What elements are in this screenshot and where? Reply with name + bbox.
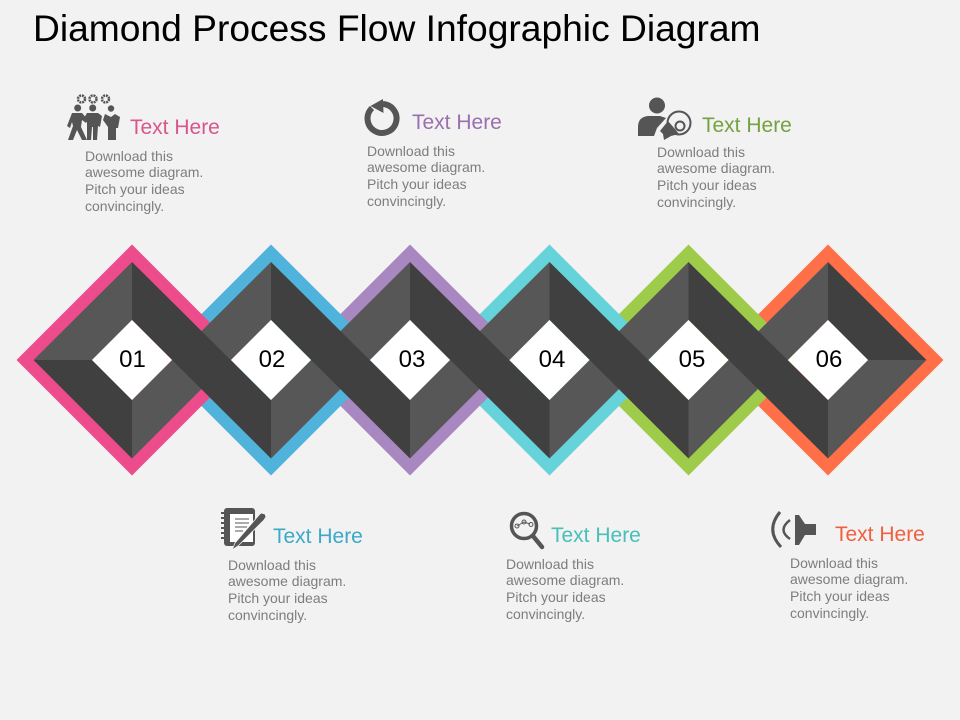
ribbon 05 to 06 (688, 262, 828, 458)
description: awesome diagram. (657, 160, 775, 176)
description: convincingly. (85, 198, 164, 214)
description: Download this (790, 555, 878, 571)
description: Download this (657, 144, 745, 160)
diamond frame 05 (573, 244, 804, 476)
diamond frame 03 (294, 244, 526, 476)
diamond frame 04 (434, 244, 665, 476)
description: Pitch your ideas (228, 590, 328, 606)
diamond 05 facets (590, 262, 787, 458)
number badge 03: 03 (399, 346, 425, 373)
diamond 03 facets (312, 262, 508, 458)
description: awesome diagram. (228, 573, 346, 589)
ribbon 04 to 05 (550, 262, 688, 458)
description: awesome diagram. (506, 572, 624, 588)
description: awesome diagram. (790, 571, 908, 587)
number badge 05: 05 (679, 346, 705, 373)
ribbon 01 to 02 (132, 262, 271, 458)
description: Pitch your ideas (506, 589, 606, 605)
number badge 02 (231, 320, 311, 400)
description: convincingly. (228, 607, 307, 623)
description: convincingly. (367, 193, 446, 209)
diamond frame 02 (156, 244, 386, 476)
description: Pitch your ideas (657, 177, 757, 193)
number badge 04 (510, 320, 590, 400)
ribbon 03 to 04 (410, 262, 550, 458)
description: Download this (228, 557, 316, 573)
icon: person with target bubble (638, 98, 690, 140)
number badge 06 (788, 320, 868, 400)
block 06 (773, 512, 925, 621)
description: Download this (85, 148, 173, 164)
title: Diamond Process Flow Infographic Diagram (33, 7, 761, 49)
number badge 01 (92, 320, 172, 400)
description: convincingly. (657, 194, 736, 210)
block 03 (367, 99, 502, 209)
description: Pitch your ideas (367, 176, 467, 192)
description: convincingly. (790, 605, 869, 621)
description: Pitch your ideas (85, 181, 185, 197)
description: awesome diagram. (367, 159, 485, 175)
heading: Text Here (412, 111, 502, 134)
description: awesome diagram. (85, 164, 203, 180)
icon: team with gears (67, 96, 120, 140)
block 01 (67, 96, 220, 214)
heading: Text Here (273, 525, 363, 548)
number badge 02: 02 (259, 346, 285, 373)
number badge 03 (370, 320, 450, 400)
diamond 02 facets (172, 262, 370, 458)
diamond 06 facets (730, 262, 926, 458)
diamond frame 01 (16, 244, 248, 476)
diamond chain (16, 244, 944, 476)
block 05 (638, 98, 792, 210)
description: Pitch your ideas (790, 588, 890, 604)
block 04 (506, 514, 641, 622)
description: Download this (506, 556, 594, 572)
number badge 06: 06 (816, 346, 842, 373)
diamond 04 facets (451, 262, 648, 458)
heading: Text Here (551, 524, 641, 547)
number badge 01: 01 (119, 346, 146, 373)
number badge 05 (648, 320, 728, 400)
heading: Text Here (130, 116, 220, 139)
number badge 04: 04 (539, 346, 565, 373)
heading: Text Here (702, 114, 792, 137)
icon: circular arrow (368, 99, 397, 133)
block 02 (221, 508, 363, 623)
diamond frame 06 (712, 244, 944, 476)
description: convincingly. (506, 606, 585, 622)
ribbon 02 to 03 (271, 262, 410, 458)
icon: speaker (773, 512, 816, 547)
diamond 01 facets (34, 262, 230, 458)
icon: magnifier with chart (512, 514, 542, 547)
description: Download this (367, 143, 455, 159)
icon: notebook and pen (221, 508, 266, 550)
heading: Text Here (835, 523, 925, 546)
